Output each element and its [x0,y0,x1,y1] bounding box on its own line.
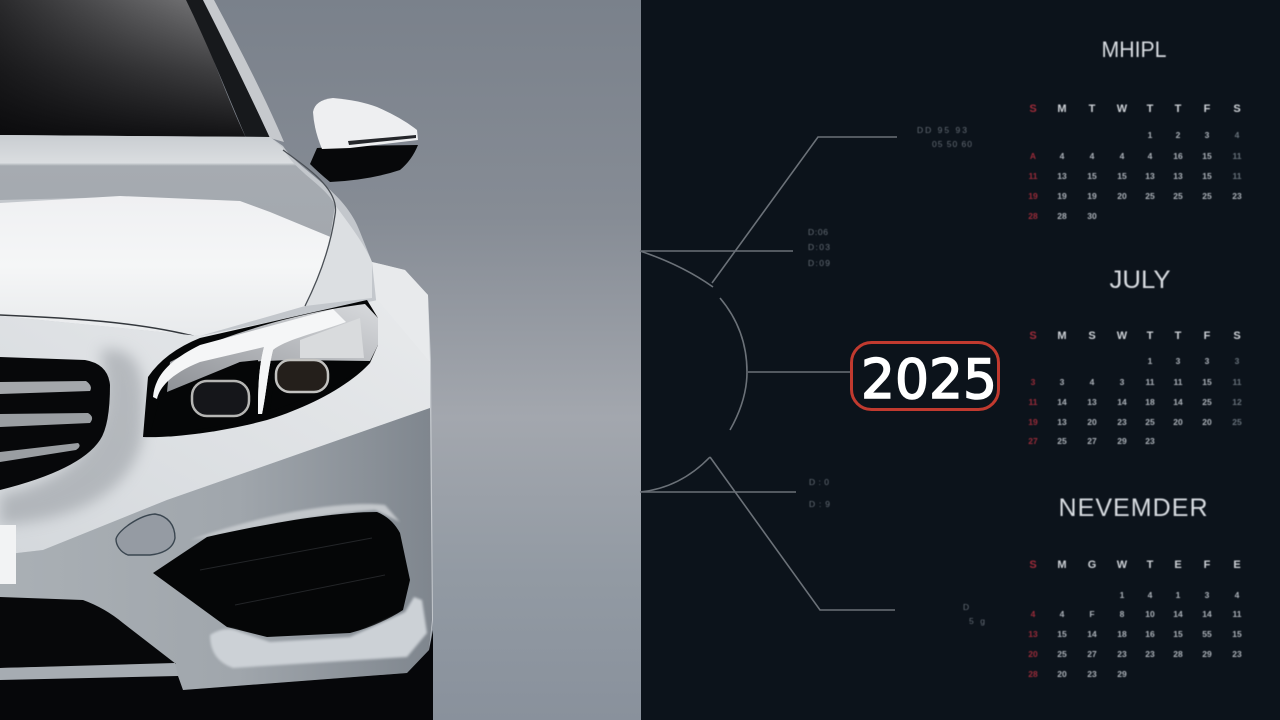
date grid: 3 [1235,356,1240,366]
date grid: 2 [1176,130,1181,140]
panel: dark calendar side [641,0,1280,720]
date grid: 12 [1232,397,1242,407]
weekday header: G [1088,559,1096,571]
date grid: 19 [1028,417,1038,427]
connector to upper note [640,250,793,252]
grille [0,357,110,490]
date grid: 19 [1028,191,1038,201]
number plate edge [0,525,16,584]
weekday header [1029,103,1241,115]
date grid: 18 [1145,397,1155,407]
date grid: 13 [1057,417,1067,427]
date grid: 3 [1205,130,1210,140]
weekday header: T [1147,559,1154,571]
date grid: 23 [1087,669,1097,679]
date grid: 15 [1202,377,1212,387]
weekday header: F [1204,103,1211,115]
weekday header: E [1233,559,1241,571]
date grid: 3 [1120,377,1125,387]
date grid: 15 [1202,171,1212,181]
weekday header: M [1057,330,1067,342]
date grid: 25 [1232,417,1242,427]
date grid: 1 [1148,130,1153,140]
date grid: 27 [1028,436,1038,446]
timeline small labels: D:9 [809,499,830,509]
weekday header: F [1204,559,1211,571]
weekday header: W [1117,559,1128,571]
date grid: 14 [1173,397,1183,407]
date grid: 25 [1145,191,1155,201]
date grid: 14 [1173,609,1183,619]
date grid: 25 [1173,191,1183,201]
date grid: 10 [1145,609,1155,619]
date grid: 11 [1174,377,1183,387]
date grid: 23 [1232,649,1242,659]
date grid: 11 [1146,377,1155,387]
weekday header: M [1057,103,1067,115]
weekday header: W [1117,330,1128,342]
windshield [0,0,246,138]
chin highlight [210,597,427,668]
date grid: 28 [1028,211,1038,221]
year badge: 2025 [861,348,997,411]
date grid: F [1089,609,1095,619]
timeline small labels: D:0 [809,477,829,487]
timeline small labels [808,125,985,626]
date grid: 23 [1117,417,1127,427]
date grid: 3 [1176,356,1181,366]
date grid [1028,356,1242,446]
date grid: 27 [1087,649,1097,659]
date grid: 25 [1057,436,1067,446]
date grid: 3 [1205,356,1210,366]
panel: studio background [0,0,641,720]
date grid: 13 [1087,397,1097,407]
date grid: 4 [1235,130,1240,140]
date grid: 4 [1060,151,1065,161]
timeline small labels: DD 95 93 [917,125,967,135]
date grid: 4 [1031,609,1036,619]
date grid: 15 [1057,629,1067,639]
date grid: 23 [1117,649,1127,659]
date grid: 23 [1145,436,1155,446]
date grid: 3 [1205,590,1210,600]
date grid: 16 [1173,151,1183,161]
date grid: 27 [1087,436,1097,446]
date grid: 20 [1202,417,1212,427]
timeline small labels: 05 50 60 [932,139,972,149]
tow hook cover [116,514,175,555]
date grid: 4 [1235,590,1240,600]
date grid: 29 [1117,669,1127,679]
date grid: 1 [1176,590,1181,600]
timeline small labels: 5 g [969,616,985,626]
timeline small labels: D:09 [808,258,830,268]
weekday header: T [1175,330,1182,342]
date grid: 3 [1031,377,1036,387]
date grid: 20 [1087,417,1097,427]
date grid: 20 [1028,649,1038,659]
lower bumper [0,408,432,690]
date grid: 1 [1148,356,1153,366]
month title: MHIPL [1102,37,1166,62]
fog light vent [153,512,410,637]
weekday header: M [1057,559,1067,571]
date grid: 19 [1057,191,1067,201]
date grid: 11 [1028,171,1038,181]
date grid: 11 [1232,377,1242,387]
weekday header: W [1117,103,1128,115]
weekday header: S [1233,103,1241,115]
date grid: 25 [1057,649,1067,659]
weekday header: F [1204,330,1211,342]
date grid: 16 [1145,629,1155,639]
date grid: 28 [1028,669,1038,679]
connector to bottom note [710,457,895,610]
calendar: first month [1028,37,1242,221]
lower air intake [0,597,176,668]
date grid: 11 [1232,609,1242,619]
date grid: 25 [1202,397,1212,407]
date grid: 25 [1145,417,1155,427]
weekday header: T [1147,330,1154,342]
calendar: november [1028,494,1242,679]
date grid: 3 [1060,377,1065,387]
date grid: 14 [1202,609,1212,619]
date grid: 30 [1087,211,1097,221]
bumper strip [0,663,178,680]
fender [305,205,372,306]
weekday header: T [1089,103,1096,115]
bonnet highlight [0,196,333,336]
panel lines [0,150,336,337]
date grid: 13 [1173,171,1183,181]
date grid: 14 [1087,629,1097,639]
mid bumper light band [0,300,430,555]
fender shoulder highlight [372,262,430,362]
timeline connector lines [640,137,897,610]
date grid: 4 [1148,590,1153,600]
date grid: 4 [1090,151,1095,161]
timeline small labels: D [963,602,969,612]
weekday header: E [1174,559,1182,571]
date grid: 11 [1028,397,1038,407]
date grid: 29 [1202,649,1212,659]
calendar: july [1028,266,1242,446]
date grid: 14 [1117,397,1127,407]
connector to lower note [640,491,796,493]
date grid: 15 [1087,171,1097,181]
date grid: 20 [1173,417,1183,427]
date grid: 28 [1057,211,1067,221]
grille surround shade [0,349,144,525]
date grid: 23 [1145,649,1155,659]
date grid: 25 [1202,191,1212,201]
lower circle arc [640,457,710,492]
date grid [1028,130,1242,221]
weekday header: S [1088,330,1096,342]
weekday header [1029,559,1241,571]
weekday header: S [1029,330,1037,342]
headlight [143,300,378,437]
date grid: 19 [1087,191,1097,201]
date grid: 55 [1202,629,1212,639]
wing mirror [310,98,418,182]
date grid: 13 [1145,171,1155,181]
date grid: 11 [1232,151,1242,161]
date grid: 13 [1028,629,1038,639]
date grid: 4 [1120,151,1125,161]
date grid: 11 [1232,171,1242,181]
weekday header [1029,330,1241,342]
date grid: 15 [1202,151,1212,161]
weekday header: T [1147,103,1154,115]
date grid: 18 [1117,629,1127,639]
date grid: 1 [1120,590,1125,600]
date grid: A [1030,151,1036,161]
lower bright crease [190,504,400,540]
date grid: 15 [1117,171,1127,181]
date grid: 20 [1117,191,1127,201]
car body base [0,135,433,690]
car front view [0,0,433,720]
weekday header: T [1175,103,1182,115]
cowl and upper panel [0,135,335,238]
weekday header: S [1029,559,1037,571]
date grid: 15 [1173,629,1183,639]
date grid: 14 [1057,397,1067,407]
date grid: 13 [1057,171,1067,181]
date grid: 4 [1060,609,1065,619]
date grid [1028,590,1242,679]
connector to year badge [748,371,850,373]
date grid: 15 [1232,629,1242,639]
date grid: 29 [1117,436,1127,446]
a-pillar [186,0,284,142]
date grid: 23 [1232,191,1242,201]
underbody shadow [0,630,433,720]
timeline small labels: D:06 [808,227,828,237]
date grid: 4 [1148,151,1153,161]
date grid: 4 [1090,377,1095,387]
timeline small labels: D:03 [808,242,830,252]
upper circle arc [640,251,747,430]
weekday header: S [1029,103,1037,115]
connector to top note [712,137,897,283]
date grid: 20 [1057,669,1067,679]
date grid: 8 [1120,609,1125,619]
month title: NEVEMDER [1058,494,1208,522]
month title: JULY [1110,266,1171,294]
weekday header: S [1233,330,1241,342]
date grid: 28 [1173,649,1183,659]
